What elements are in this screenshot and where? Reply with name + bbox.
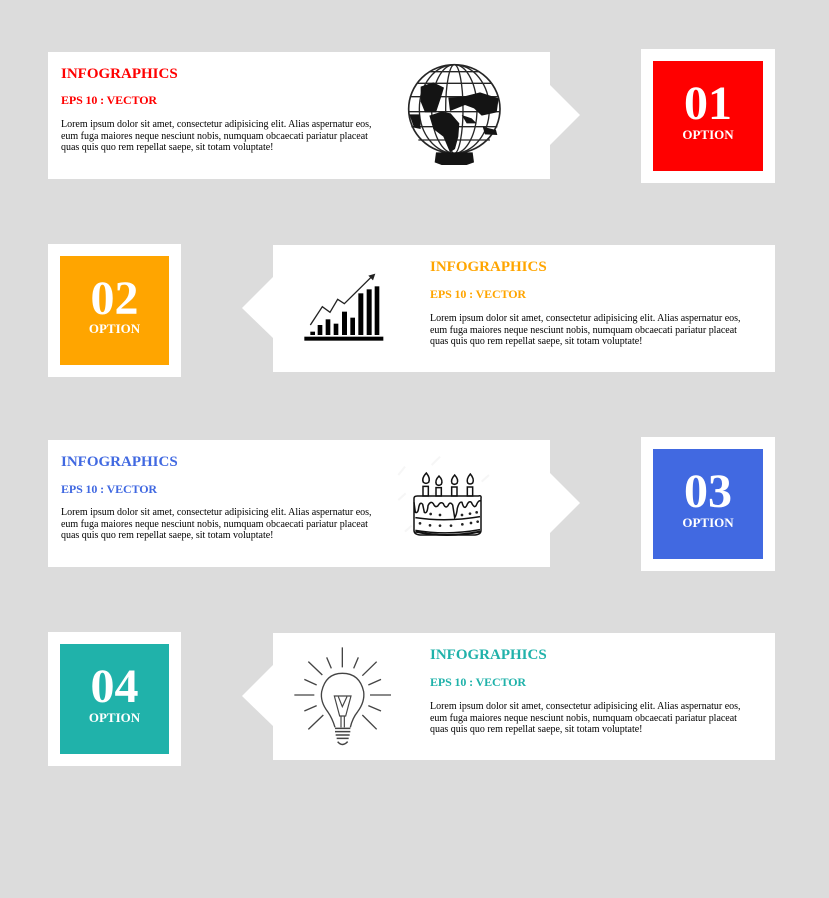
number box bbox=[48, 244, 181, 377]
body text bbox=[61, 507, 372, 541]
card with arrow bbox=[242, 245, 775, 372]
body text: Lorem ipsum dolor sit amet, consectetur adipisicing elit. Alias aspernatur eos, bbox=[61, 507, 372, 518]
body text: quas quis quo rem repellat saepe, sit totam voluptate! bbox=[430, 336, 642, 347]
icon: bar chart bbox=[304, 274, 384, 341]
colour tile bbox=[653, 449, 763, 559]
body text: quas quis quo rem repellat saepe, sit totam voluptate! bbox=[430, 724, 642, 735]
heading: INFOGRAPHICS bbox=[430, 259, 547, 275]
colour tile bbox=[60, 256, 169, 365]
card with arrow bbox=[242, 633, 775, 760]
body text: eum fuga maiores neque nesciunt nobis, numquam obcaecati pariatur placeat bbox=[430, 324, 737, 336]
number box bbox=[641, 437, 775, 571]
panel: row 1 bbox=[48, 49, 775, 183]
colour tile bbox=[60, 644, 169, 754]
label: OPTION bbox=[89, 321, 140, 336]
heading: INFOGRAPHICS bbox=[61, 454, 178, 470]
number: 03 bbox=[684, 465, 732, 518]
label: OPTION bbox=[89, 710, 140, 725]
subheading: EPS 10 : VECTOR bbox=[61, 482, 157, 496]
body text: Lorem ipsum dolor sit amet, consectetur adipisicing elit. Alias aspernatur eos, bbox=[430, 701, 741, 712]
body text: Lorem ipsum dolor sit amet, consectetur adipisicing elit. Alias aspernatur eos, bbox=[430, 313, 741, 324]
label: OPTION bbox=[682, 127, 734, 142]
icon: globe bbox=[408, 64, 501, 165]
heading: INFOGRAPHICS bbox=[61, 66, 178, 82]
number box bbox=[48, 632, 181, 766]
card with arrow bbox=[48, 52, 580, 179]
icon: birthday cake bbox=[398, 456, 490, 536]
body text bbox=[61, 119, 372, 153]
number: 04 bbox=[90, 660, 138, 713]
heading: INFOGRAPHICS bbox=[430, 647, 547, 663]
icon: light bulb bbox=[294, 647, 391, 746]
body text bbox=[430, 701, 741, 735]
card with arrow bbox=[48, 440, 580, 567]
body text bbox=[430, 313, 741, 347]
body text: Lorem ipsum dolor sit amet, consectetur adipisicing elit. Alias aspernatur eos, bbox=[61, 119, 372, 130]
body text: eum fuga maiores neque nesciunt nobis, numquam obcaecati pariatur placeat bbox=[61, 518, 368, 530]
number: 02 bbox=[90, 272, 138, 325]
body text: eum fuga maiores neque nesciunt nobis, numquam obcaecati pariatur placeat bbox=[430, 712, 737, 724]
subheading: EPS 10 : VECTOR bbox=[430, 287, 526, 301]
colour tile bbox=[653, 61, 763, 171]
subheading: EPS 10 : VECTOR bbox=[430, 675, 526, 689]
body text: quas quis quo rem repellat saepe, sit totam voluptate! bbox=[61, 142, 273, 153]
number: 01 bbox=[684, 77, 732, 130]
body text: eum fuga maiores neque nesciunt nobis, numquam obcaecati pariatur placeat bbox=[61, 130, 368, 142]
panel: row 3 bbox=[48, 437, 775, 571]
subheading: EPS 10 : VECTOR bbox=[61, 93, 157, 107]
panel: row 4 bbox=[48, 632, 775, 766]
number box bbox=[641, 49, 775, 183]
panel: row 2 bbox=[48, 244, 775, 377]
label: OPTION bbox=[682, 515, 734, 530]
body text: quas quis quo rem repellat saepe, sit totam voluptate! bbox=[61, 530, 273, 541]
